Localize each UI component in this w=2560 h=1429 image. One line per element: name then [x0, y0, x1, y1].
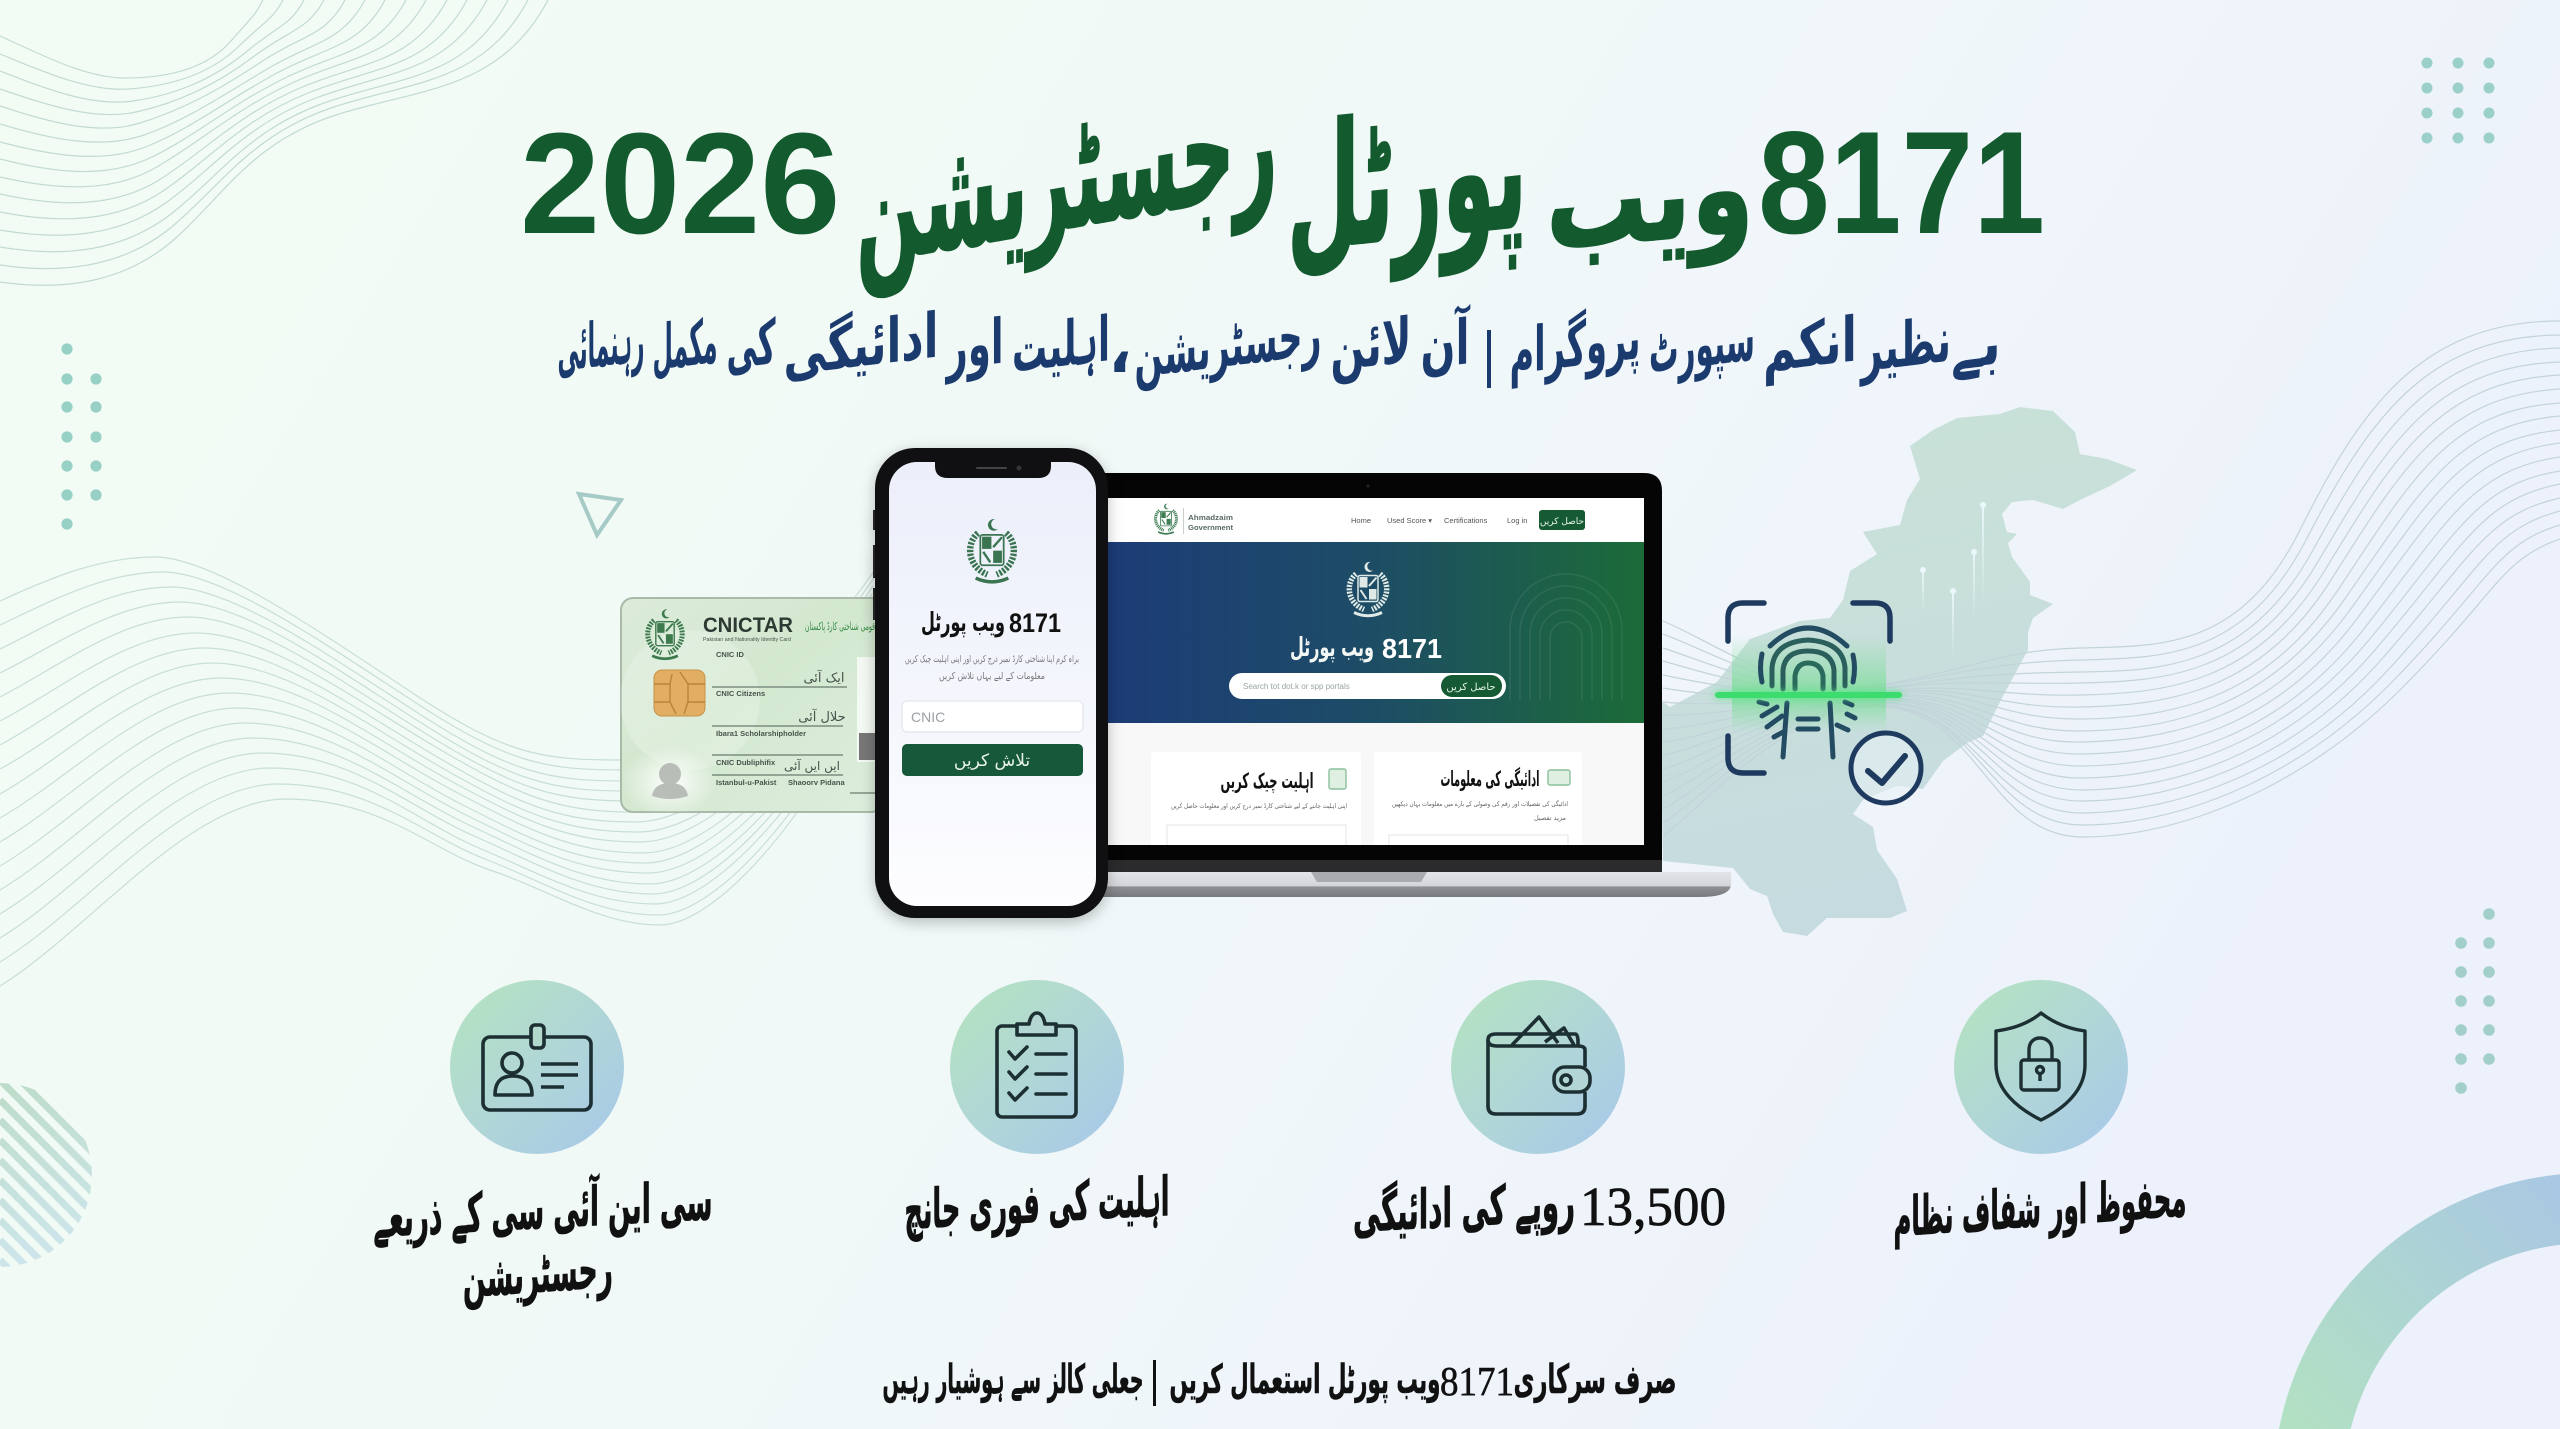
card details: حلال آئی	[798, 708, 846, 725]
icon: wallet	[1451, 980, 1625, 1154]
subtitle: انکم	[1763, 302, 1857, 387]
phone crest	[970, 519, 1014, 582]
dot pattern: top left	[61, 343, 102, 530]
subtitle: آن	[1420, 303, 1471, 384]
label: رجسٹریشن	[463, 1237, 613, 1310]
subtitle: نظیر	[1859, 303, 1951, 387]
card details: ایک آئی	[803, 669, 845, 686]
card details	[703, 637, 846, 787]
subtitle: ادائیگی	[783, 299, 939, 390]
site header: Log in	[1507, 516, 1527, 525]
footer note: جعلی کالز سے ہوشیار رہیں	[882, 1357, 1144, 1403]
phone description: براہ کرم اپنا شناختی کارڈ نمبر درج کریں اور اپنی اہلیت چیک کریں	[905, 654, 1079, 665]
label: روپے کی ادائیگی	[1353, 1170, 1575, 1245]
title: ویب	[1546, 113, 1754, 281]
card Urdu header: قومی شناختی کارڈ پاکستان	[805, 620, 875, 633]
site header: Used Score ▾	[1387, 516, 1432, 525]
fingerprint scanner	[1715, 603, 1921, 803]
triangle outline	[579, 494, 621, 535]
map light spikes	[1920, 502, 1986, 657]
site hero: 8171	[1382, 633, 1442, 664]
phone notch	[935, 462, 1051, 478]
phone search button	[902, 744, 1083, 776]
card details: CNIC ID	[716, 650, 744, 659]
laptop	[1090, 473, 1731, 897]
title: پورٹل	[1287, 69, 1527, 292]
title: 2026	[520, 103, 840, 264]
card photo silhouette	[652, 763, 688, 799]
site header: Government	[1188, 523, 1234, 532]
phone CNIC input	[902, 701, 1083, 732]
card crest	[648, 609, 682, 659]
site hero	[1090, 542, 1644, 723]
footer note	[882, 1357, 1676, 1406]
infographic canvas: محفوظ اور شفاف نظام	[1894, 1166, 2186, 1249]
subtitle: بے	[1951, 305, 2001, 384]
title	[520, 52, 2045, 302]
label: 13,500	[1580, 1176, 1726, 1237]
footer note: 8171	[1440, 1358, 1514, 1404]
laptop screen	[1090, 498, 1644, 855]
subtitle: ،	[1108, 314, 1132, 387]
subtitle: کی	[726, 305, 776, 384]
site header: Home	[1351, 516, 1371, 525]
site card: payment	[1388, 767, 1571, 845]
site card: payment: ادائیگی کی معلومات	[1440, 766, 1540, 791]
phone title: ویب پورٹل	[921, 608, 1005, 638]
card details: Pakistan and Nationality Identity Card	[703, 637, 791, 643]
striped circle	[0, 1083, 92, 1267]
site card: eligibility: اپنی اہلیت جاننے کے لیے شناختی کارڈ نمبر درج کریں اور معلومات حاصل کریں	[1171, 802, 1347, 810]
Pakistan map	[1660, 407, 2137, 936]
site header: Certifications	[1444, 516, 1488, 525]
site card: eligibility	[1166, 768, 1347, 845]
card details: Ibara1 Scholarshipholder	[716, 729, 806, 738]
laptop lid	[1090, 473, 1662, 872]
subtitle: اہلیت	[1012, 302, 1110, 387]
site card: payment: مزید تفصیل	[1534, 814, 1566, 822]
fingerprint	[1759, 628, 1855, 757]
laptop base	[1090, 872, 1731, 897]
dot pattern: lower right	[2455, 908, 2495, 1094]
site hero: حاصل کریں	[1446, 682, 1496, 693]
phone CNIC input: CNIC	[911, 709, 945, 725]
site header	[1154, 504, 1585, 535]
subtitle: سپورٹ	[1649, 302, 1755, 387]
subtitle	[558, 297, 2001, 392]
subtitle: اور	[945, 305, 1004, 385]
feature: 13,500 rupees payment	[1353, 980, 1726, 1245]
site hero: Search tot dot.k or spp portals	[1243, 682, 1350, 691]
card heading: CNICTAR	[703, 614, 793, 637]
footer note: صرف سرکاری	[1514, 1357, 1676, 1403]
phone	[873, 448, 1108, 918]
feature: instant eligibility check	[904, 980, 1170, 1242]
card details: CNIC Citizens	[716, 689, 765, 698]
phone description	[905, 654, 1079, 682]
feature: CNIC registration	[374, 980, 712, 1310]
infographic canvas: سی این آئی سی کے ذریعے	[374, 1167, 712, 1250]
scanner brackets	[1728, 603, 1890, 773]
subtitle: رہنمائی	[557, 303, 645, 386]
dot pattern: top right	[2422, 58, 2494, 144]
verified check	[1851, 733, 1921, 803]
scan line	[1715, 692, 1902, 698]
label	[374, 1167, 712, 1310]
infographic canvas: اہلیت کی فوری جانچ	[904, 1165, 1170, 1242]
phone description: معلومات کے لیے یہاں تلاش کریں	[939, 671, 1045, 682]
card details: CNIC Dubliphifix	[716, 758, 776, 767]
site header: Ahmadzaim	[1188, 513, 1233, 522]
feature: secure and transparent system	[1894, 980, 2186, 1249]
icon: clipboard	[950, 980, 1124, 1154]
card details: ایں ایں آئی	[784, 758, 840, 774]
card chip	[654, 670, 705, 716]
title: 8171	[1758, 101, 2045, 264]
site hero: ویب پورٹل	[1290, 633, 1374, 663]
subtitle: مکمل	[652, 304, 718, 385]
site header: حاصل کریں	[1540, 517, 1584, 527]
phone search button: تلاش کریں	[954, 751, 1030, 771]
subtitle: رجسٹریشن	[1134, 297, 1322, 392]
site card: eligibility: اہلیت چیک کریں	[1220, 769, 1314, 793]
corner arc	[2279, 1174, 2560, 1429]
icon: shield with lock	[1954, 980, 2128, 1154]
footer note: ویب پورٹل استعمال کریں	[1170, 1357, 1440, 1403]
phone screen	[889, 462, 1096, 906]
card details: Istanbul-u-Pakist	[716, 778, 777, 787]
subtitle: لائن	[1330, 303, 1412, 386]
card details: Shaoorv Pidana	[788, 778, 846, 787]
subtitle: پروگرام	[1509, 300, 1641, 390]
site card: payment: ادائیگی کی تفصیلات اور رقم کی وصولی کے بارے میں معلومات یہاں دیکھیں	[1392, 800, 1568, 808]
phone title: 8171	[1009, 608, 1061, 638]
CNIC card	[620, 598, 883, 818]
icon: ID card	[450, 980, 624, 1154]
